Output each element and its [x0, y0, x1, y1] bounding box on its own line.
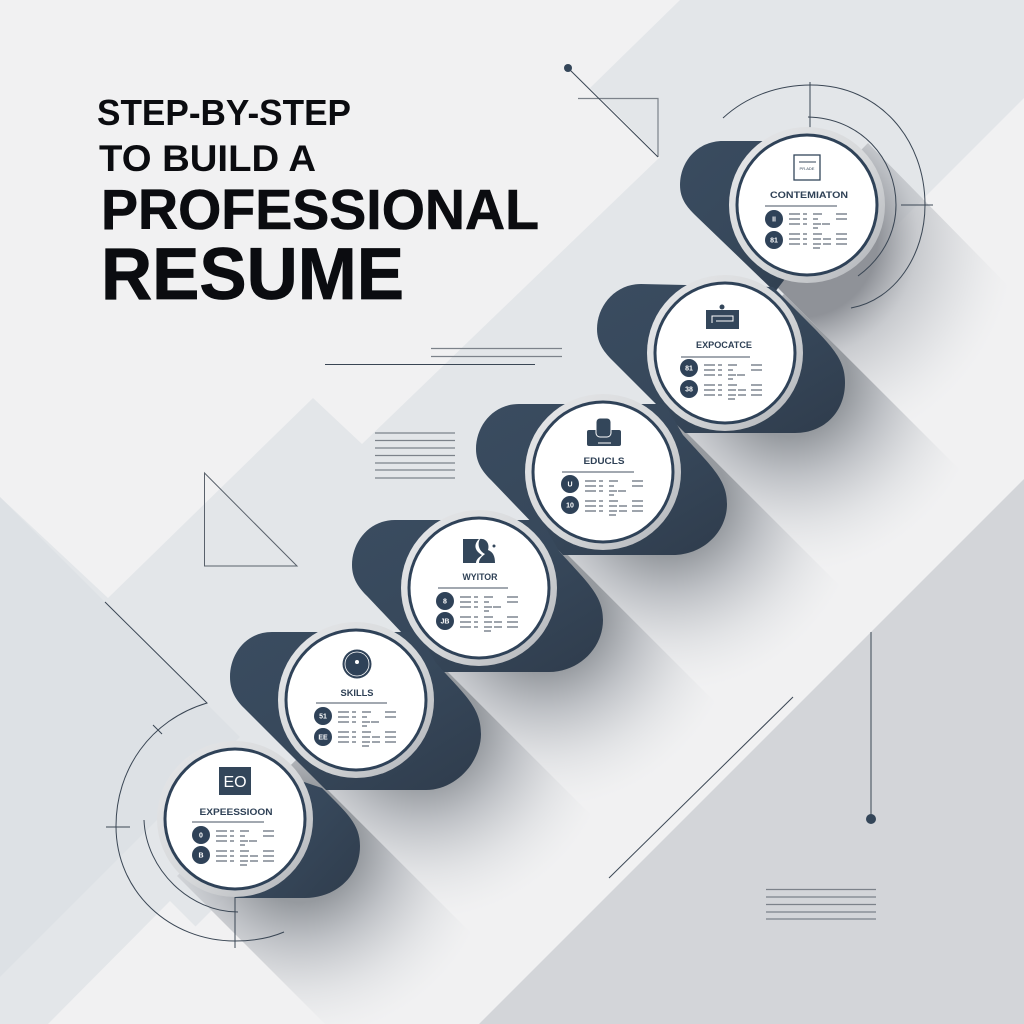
icon: EO square: EO — [223, 774, 247, 791]
icon: target — [342, 650, 372, 678]
shadows — [177, 143, 1024, 1024]
icon: document: PR.ADE — [800, 166, 815, 171]
navy pills — [230, 141, 845, 898]
triangle outline — [204, 473, 297, 566]
step circle: expocatce: 38 — [685, 386, 693, 394]
top triangle with dot — [564, 64, 658, 157]
step circle: skills: 51 — [319, 714, 327, 720]
step circle: expression — [157, 741, 313, 897]
striped lines — [375, 433, 455, 478]
title line 3: PROFESSIONAL — [101, 178, 539, 242]
step circle: educls — [525, 394, 681, 550]
title — [97, 92, 539, 315]
icon: EO square — [219, 767, 251, 795]
step circle: contact: 81 — [770, 238, 778, 244]
step circle: educls: 10 — [566, 502, 574, 510]
step circle: wyitor: JB — [441, 618, 449, 626]
step circle: expocatce — [647, 275, 803, 431]
vertical line with dot — [866, 632, 876, 824]
arcs around top circle — [723, 82, 933, 308]
icon: document — [794, 155, 820, 180]
title line 4: RESUME — [101, 234, 404, 315]
step circle: skills — [278, 622, 434, 778]
bottom striped lines — [766, 890, 876, 919]
step circle: contact — [729, 127, 885, 283]
heading: CONTEMIATON — [770, 190, 848, 201]
heading: WYITOR — [462, 572, 498, 583]
step circle: contact: II — [772, 216, 776, 224]
step circle: skills: EE — [318, 734, 328, 742]
arcs around bottom circle — [105, 602, 284, 948]
heading: EDUCLS — [584, 456, 624, 467]
title line 1: STEP-BY-STEP — [97, 92, 351, 133]
mid horizontal lines — [325, 348, 562, 364]
step circle: educls: U — [567, 482, 573, 488]
step circle: expocatce: 81 — [685, 366, 693, 372]
step circle: expression: 0 — [199, 832, 203, 840]
heading: SKILLS — [340, 688, 374, 699]
title line 2: TO BUILD A — [99, 138, 316, 179]
step circle: expression: B — [198, 852, 204, 860]
step circle: wyitor: 8 — [443, 598, 447, 606]
heading: EXPOCATCE — [696, 340, 752, 351]
icon: profile — [463, 539, 496, 563]
icon: briefcase — [706, 304, 739, 329]
diagonal line — [609, 697, 793, 878]
icon: stamp — [587, 418, 621, 446]
heading: EXPEESSIOON — [200, 807, 273, 818]
step circle: wyitor — [401, 510, 557, 666]
decorative line work — [105, 64, 933, 948]
